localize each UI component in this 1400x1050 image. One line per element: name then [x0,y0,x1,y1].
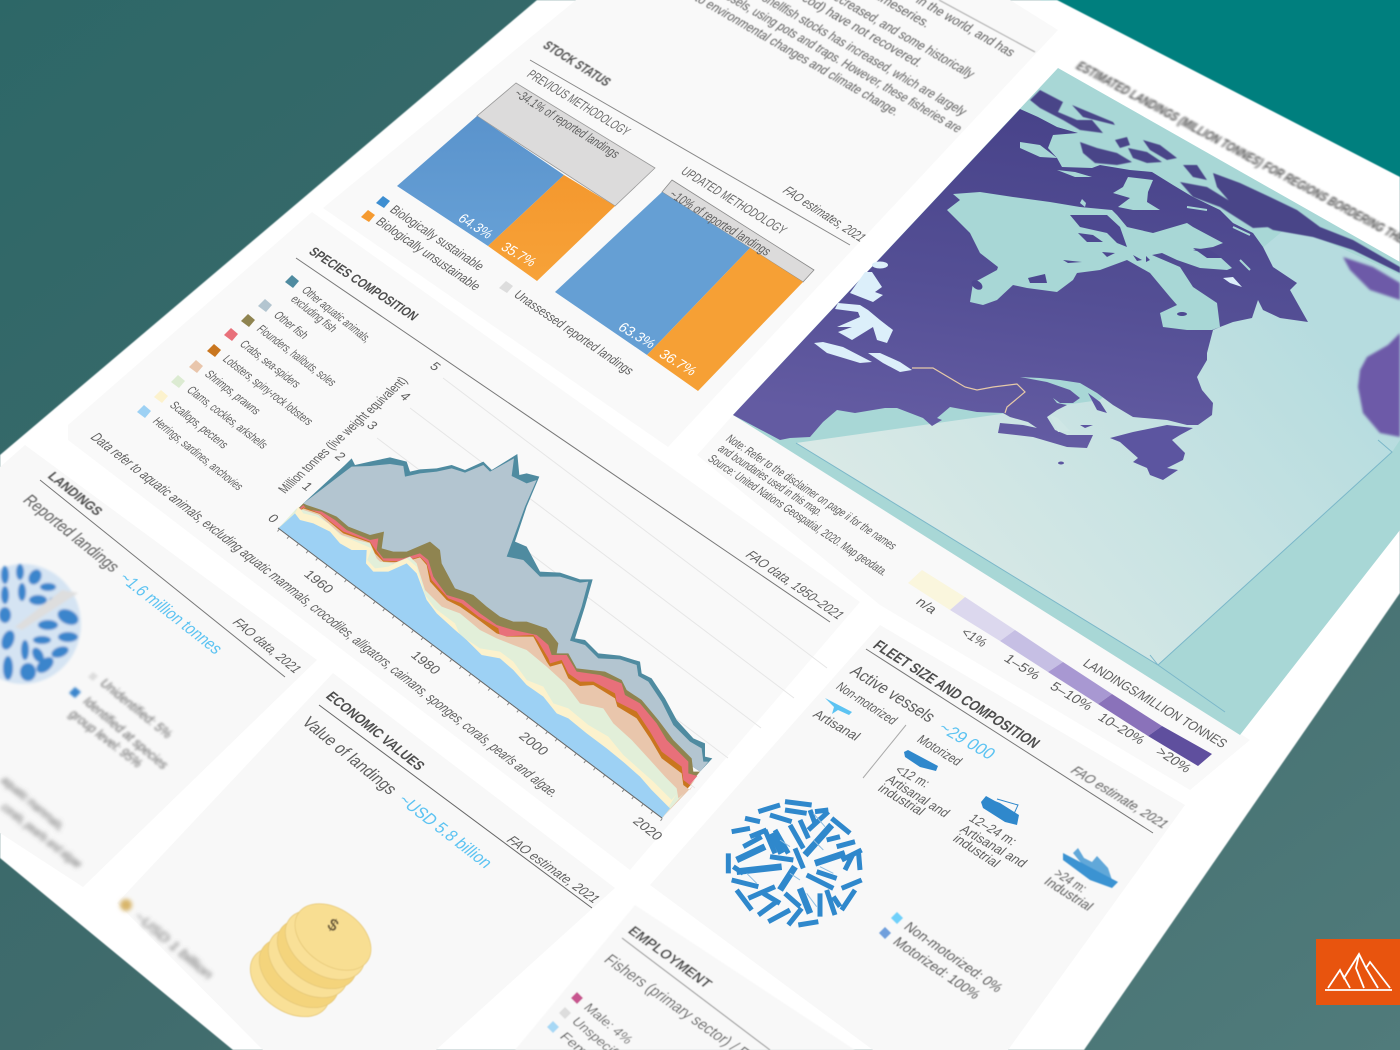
panel: employment [515,905,855,1050]
chart x axis: 1980 [408,648,445,677]
source: species: FAO data, 1950–2021 [743,547,848,622]
icon: medium boat [981,796,1019,825]
legend: landings: Unidentified: 5% [97,676,177,741]
map ocean [733,68,1400,735]
bar labels: ~34.1% of reported landings [511,86,624,161]
icon: large boat [1063,848,1118,888]
fish circle [0,564,81,684]
hudson bay [947,192,1232,330]
chart y axis: 3 [364,418,381,432]
value of landings: Value of landings [298,713,402,798]
reported landings value: ~1.6 million tonnes [115,569,227,657]
legend: species: excluding fish [288,293,341,334]
reported landings value [19,491,227,657]
chart gridlines [311,378,827,788]
chart y axis: 0 [265,511,282,525]
landings note: aquatic mammals, [0,774,69,833]
bar: updated methodology [555,180,814,391]
logo badge [1316,939,1400,1005]
legend: species: Flounders, halibuts, soles [254,322,340,388]
map legend: 5–10% [1047,679,1097,713]
northern inlets [1020,142,1250,270]
legend: landings [66,672,177,771]
legend: species: Other aquatic animals, [299,284,375,345]
reported landings value: Reported landings [19,491,124,575]
stacked area chart [278,454,712,818]
chart y axis: 5 [427,359,444,373]
chart x axis: 2020 [630,814,667,843]
vessel categories: <12 m: [892,762,933,790]
bar labels: FAO estimates, 2021 [780,183,869,244]
heading: economic values: ECONOMIC VALUES [322,690,427,774]
map note: and boundaries used in this map. [715,442,827,518]
vessel categories: Artisanal [810,707,864,743]
bar labels: 63.3% [614,320,659,352]
value of landings: ~USD 5.8 billion [394,791,497,871]
chart y axis [265,359,444,525]
bar labels: ~10% of reported landings [666,187,775,258]
map note: Source: United Nations Geospatial, 2020. Map geodata. [705,452,892,578]
species note: Data refer to aquatic animals, excluding aquatic mammals, crocodiles, alligators, caimans, sponges, corals, pearls and algae. [87,431,562,800]
legend: species: Clams, cockles, arkshells [184,383,271,451]
source: landings: FAO data, 2021 [230,615,305,676]
legend: stock status: Biologically sustainable [387,202,488,273]
vessel circle [728,802,862,925]
vessel categories: industrial [875,781,929,818]
map legend: 10–20% [1095,710,1149,747]
panel: fleet size and composition [650,625,1185,1050]
legend: species: Crabs, sea-spiders [237,337,304,390]
panel: species composition [68,212,860,870]
chart y axis: 4 [397,389,414,403]
bar: previous methodology [397,83,655,281]
panel: map [697,58,1400,790]
vessel categories: 12–24 m: [966,811,1021,848]
chart x axis: 2000 [516,729,553,758]
heading: employment: EMPLOYMENT [624,924,715,991]
chart y axis: 2 [332,449,349,463]
map neighbouring land [1343,257,1400,437]
panel: economic values [117,673,615,1050]
active vessels: Active vessels [846,662,940,726]
icon: small boat [904,750,938,771]
legend: coin [120,899,218,981]
legend: stock status: Biologically unsustainable [373,214,485,293]
heading: landings: LANDINGS [45,469,106,518]
value of landings [298,713,497,871]
chart x axis: 1960 [301,567,338,596]
heading: fleet: FLEET SIZE AND COMPOSITION [869,638,1043,752]
east coast island [1110,425,1193,480]
active vessels [846,662,1000,763]
map legend: <1% [958,625,991,650]
source: fleet: FAO estimate, 2021 [1068,763,1172,831]
great lakes [814,262,912,372]
legend: fleet: Non-motorized: 0% [900,920,1005,996]
bar labels [454,67,869,379]
vessel categories: Artisanal and [957,822,1031,870]
legend: employment [547,992,637,1050]
legend: stock status [361,196,638,377]
map land mass [733,109,1308,480]
background teal corner [1040,0,1400,190]
heading: species composition: SPECIES COMPOSITION [306,244,422,323]
map arctic islands [1030,90,1400,273]
chart y axis: Million tonnes (live weight equivalent) [274,374,410,496]
vessel categories: Artisanal and [883,772,954,820]
map legend [908,570,1231,775]
vessel categories [810,679,1118,913]
landings note: corals, pearls and algae [0,801,86,870]
international border [912,368,1025,413]
legend: species: Scallops, pectens [167,399,232,451]
map exclusive economic zone [796,225,1400,712]
map legend: LANDINGS/MILLION TONNES [1080,656,1231,750]
bar labels: 64.3% [454,212,496,242]
legend: species [137,275,375,493]
source: economic: FAO estimate, 2021 [504,833,603,906]
heading: stock status: STOCK STATUS [540,38,615,89]
inland lake [1223,277,1242,287]
icon: coin stack: $ [324,914,342,936]
chart x axis [278,528,667,843]
panel: landings [0,445,317,887]
legend: stock status: Unassessed reported landings [511,287,638,377]
icon: canoe [825,698,852,715]
legend: species: Shrimps, prawns [202,368,264,417]
bar labels: 36.7% [655,347,700,379]
legend: employment: Male: 4% [581,1000,637,1046]
gulf islands [1058,393,1107,464]
chart y axis: 1 [299,479,316,493]
map legend: >20% [1153,744,1195,775]
bar labels: 35.7% [497,240,539,270]
vessel categories: industrial [950,831,1004,870]
icon: coin stack [237,890,383,1031]
bar labels: UPDATED METHODOLOGY [678,164,791,237]
map note [705,432,901,578]
vessel categories: Industrial [1041,874,1097,913]
legend: coin: ~USD 1 billion [131,909,218,981]
legend: fleet [879,912,1005,1002]
legend: fleet: Motorized: 100% [889,935,983,1002]
legend: species: Other fish [271,309,312,341]
legend: landings: Identified at species [80,694,173,771]
map note: Note: Refer to the disclaimer on page ii for the names [723,432,901,552]
legend: species: Lobsters, spiny-rock lobsters [220,352,317,428]
vessel categories: Motorized [914,732,966,768]
active vessels: ~29 000 [934,718,1000,763]
vessel categories: >24 m: [1051,866,1091,895]
legend: species: Herrings, sardines, anchovies [150,415,247,493]
bay islands [970,215,1222,316]
legend: landings: group level: 95% [66,707,147,770]
map legend: 1–5% [1001,651,1044,682]
vessel categories: Non-motorized [833,679,901,727]
map legend: n/a [913,594,941,616]
panel: stock status [323,0,1058,447]
bar labels: PREVIOUS METHODOLOGY [524,67,634,138]
